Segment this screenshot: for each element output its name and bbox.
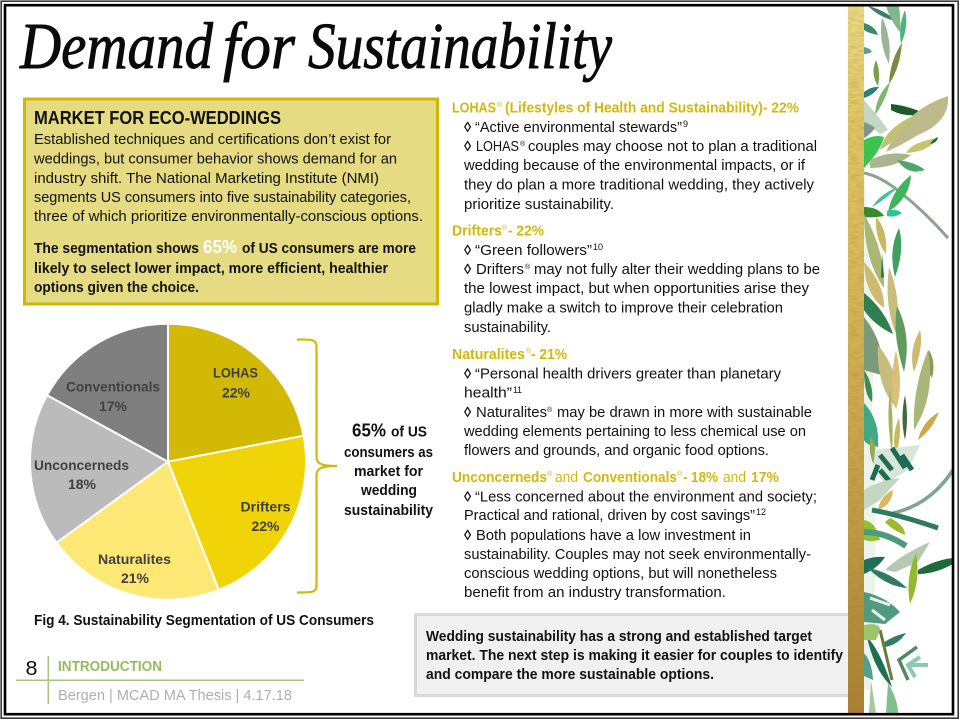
label: Conventionals: Conventionals xyxy=(66,379,160,395)
title: Demand xyxy=(19,10,214,83)
panel: conclusion callout: and compare the more sustainable options. xyxy=(426,667,714,683)
segment: Drifters: 10 xyxy=(593,242,603,252)
segment: Drifters: gladly make a switch to improve their celebration xyxy=(464,300,783,316)
panel key finding: likely to select lower impact, more efficient, healthier xyxy=(34,261,388,277)
bracket xyxy=(297,339,337,593)
segment: Unconcerneds and Conventionals: conscious wedding options, but will nonetheless xyxy=(464,566,777,582)
bracket callout: 65%: consumers as xyxy=(344,445,433,461)
segment: LOHAS: ® xyxy=(497,101,503,109)
panel body text: three of which prioritize environmentally-conscious options. xyxy=(34,209,423,225)
segment: LOHAS: ◊ xyxy=(464,120,472,136)
segment: Naturalites: ◊ xyxy=(464,366,472,382)
segment: Drifters: may not fully alter their wedding plans to be xyxy=(534,262,820,278)
segment: Naturalites: flowers and grounds, and organic food options. xyxy=(464,443,769,459)
segment: LOHAS: wedding because of the environmental impacts, or if xyxy=(463,158,806,174)
segment: LOHAS: they do plan a more traditional wedding, they actively xyxy=(464,178,815,194)
footer xyxy=(16,656,304,704)
segment: Naturalites: Naturalites xyxy=(476,405,547,421)
segment: LOHAS: couples may choose not to plan a traditional xyxy=(528,139,817,155)
pie chart xyxy=(30,324,306,600)
label: Conventionals xyxy=(66,379,160,414)
segment: Unconcerneds and Conventionals: 17% xyxy=(751,470,779,486)
segment: Unconcerneds and Conventionals: Conventionals xyxy=(583,470,677,486)
figure caption: Fig 4. Sustainability Segmentation of US Consumers xyxy=(34,613,374,629)
segment: Naturalites: Naturalites xyxy=(452,347,525,363)
segment: Drifters: ® xyxy=(525,263,531,271)
label: Unconcerneds: 18% xyxy=(68,476,97,492)
panel body text: segments US consumers into five sustainability categories, xyxy=(34,190,411,206)
panel body text xyxy=(33,132,423,225)
label: LOHAS: LOHAS xyxy=(213,365,258,381)
segment: Drifters: sustainability. xyxy=(464,320,551,336)
segment: Unconcerneds and Conventionals: “Less concerned about the environment and society; xyxy=(475,490,817,506)
watercolor foliage xyxy=(864,6,953,713)
label: Naturalites: 21% xyxy=(121,570,150,586)
segment: Drifters: - 22% xyxy=(508,224,544,240)
panel body text: industry shift. The National Marketing Institute (NMI) xyxy=(34,171,379,187)
segment: Naturalites: health” xyxy=(464,386,512,402)
segment: Naturalites: - 21% xyxy=(531,347,567,363)
segment: Unconcerneds and Conventionals: ® xyxy=(677,470,683,478)
label: Drifters: 22% xyxy=(252,518,280,534)
gold foil strip xyxy=(848,6,864,714)
segment: Drifters: ◊ xyxy=(464,262,472,278)
bracket callout: 65% xyxy=(344,421,433,519)
label: Drifters: Drifters xyxy=(240,499,291,515)
segment: Unconcerneds and Conventionals: and xyxy=(723,470,746,486)
panel key finding xyxy=(34,237,416,296)
segment: Unconcerneds and Conventionals: ® xyxy=(547,470,553,478)
title xyxy=(19,10,613,83)
label: LOHAS xyxy=(213,365,258,401)
segment: Naturalites: ◊ xyxy=(464,405,472,421)
panel key finding: 65% xyxy=(203,237,237,257)
segment: Unconcerneds and Conventionals: 12 xyxy=(756,507,766,517)
panel key finding: options given the choice. xyxy=(34,280,199,296)
segment: Naturalites: may be drawn in more with sustainable xyxy=(557,405,812,421)
segment: Unconcerneds and Conventionals: ◊ xyxy=(464,528,472,544)
segment: LOHAS: “Active environmental stewards” xyxy=(475,120,682,136)
panel: conclusion callout: market. The next step is making it easier for couples to identify xyxy=(426,648,843,664)
segment: Unconcerneds and Conventionals: Both populations have a low investment in xyxy=(476,528,751,544)
segment: Drifters: ◊ xyxy=(464,243,472,259)
segment: Naturalites: ® xyxy=(526,347,532,355)
segment: Drifters xyxy=(452,224,820,336)
segment: LOHAS: ◊ xyxy=(464,139,472,155)
segment: LOHAS xyxy=(452,101,817,213)
segment: Drifters: the lowest impact, but when opportunities arise they xyxy=(464,281,810,297)
segment: Unconcerneds and Conventionals: Practical and rational, driven by cost savings” xyxy=(464,508,755,524)
bracket callout: 65%: sustainability xyxy=(344,503,433,519)
segment: Unconcerneds and Conventionals: sustainability. Couples may not seek environmentally- xyxy=(464,547,811,563)
bracket callout: 65%: market for xyxy=(354,464,423,480)
segment: Naturalites: ® xyxy=(547,406,553,414)
title: for xyxy=(223,10,295,83)
segment: LOHAS: LOHAS xyxy=(476,139,519,155)
segment: Unconcerneds and Conventionals: benefit from an industry transformation. xyxy=(464,585,726,601)
panel: market for eco-weddings xyxy=(24,99,438,304)
label: Unconcerneds xyxy=(34,457,129,492)
section name: INTRODUCTION xyxy=(58,659,162,675)
segment: LOHAS: LOHAS xyxy=(452,101,496,117)
label: Naturalites: Naturalites xyxy=(98,551,171,567)
panel: conclusion callout: Wedding sustainability has a strong and established target xyxy=(426,629,812,645)
label: Unconcerneds: Unconcerneds xyxy=(34,457,129,473)
segment: Naturalites: wedding elements pertaining to less chemical use on xyxy=(463,424,806,440)
segment: Unconcerneds and Conventionals: Unconcerneds xyxy=(452,470,547,486)
panel heading: MARKET FOR ECO-WEDDINGS xyxy=(34,108,281,128)
bracket callout: 65%: of US xyxy=(391,425,427,441)
bracket callout: 65%: wedding xyxy=(360,483,417,499)
segment: Naturalites: 11 xyxy=(513,385,522,395)
panel body text: Established techniques and certifications don’t exist for xyxy=(34,132,391,148)
segment: LOHAS: ® xyxy=(520,140,526,148)
segment: Unconcerneds and Conventionals: ◊ xyxy=(464,490,472,506)
segment: Unconcerneds and Conventionals: and xyxy=(555,470,578,486)
label: Naturalites xyxy=(98,551,171,586)
label: LOHAS: 22% xyxy=(222,385,251,401)
title: Sustainability xyxy=(308,10,613,83)
segment: Unconcerneds and Conventionals: - 18% xyxy=(683,470,718,486)
label: Conventionals: 17% xyxy=(99,398,128,414)
bracket callout: 65%: 65% xyxy=(352,421,386,441)
panel key finding: of US consumers are more xyxy=(242,241,416,257)
segment: LOHAS: prioritize sustainability. xyxy=(464,197,614,213)
page number: 8 xyxy=(26,658,38,680)
segment: LOHAS: 9 xyxy=(683,119,688,129)
panel body text: weddings, but consumer behavior shows demand for an xyxy=(33,152,397,168)
segment: LOHAS: (Lifestyles of Health and Sustainability)- 22% xyxy=(505,101,799,117)
segment: Drifters: “Green followers” xyxy=(475,243,592,259)
thesis credit: Bergen | MCAD MA Thesis | 4.17.18 xyxy=(58,688,292,704)
segment: Naturalites xyxy=(452,347,812,459)
segment: Drifters: Drifters xyxy=(452,224,502,240)
panel: conclusion callout xyxy=(416,614,852,696)
segment: Drifters: ® xyxy=(502,224,508,232)
label: Drifters xyxy=(240,499,291,534)
panel key finding: The segmentation shows xyxy=(34,241,199,257)
segment: Unconcerneds and Conventionals xyxy=(452,470,817,601)
segment: Drifters: Drifters xyxy=(476,262,524,278)
segment: Naturalites: “Personal health drivers greater than planetary xyxy=(475,366,782,382)
